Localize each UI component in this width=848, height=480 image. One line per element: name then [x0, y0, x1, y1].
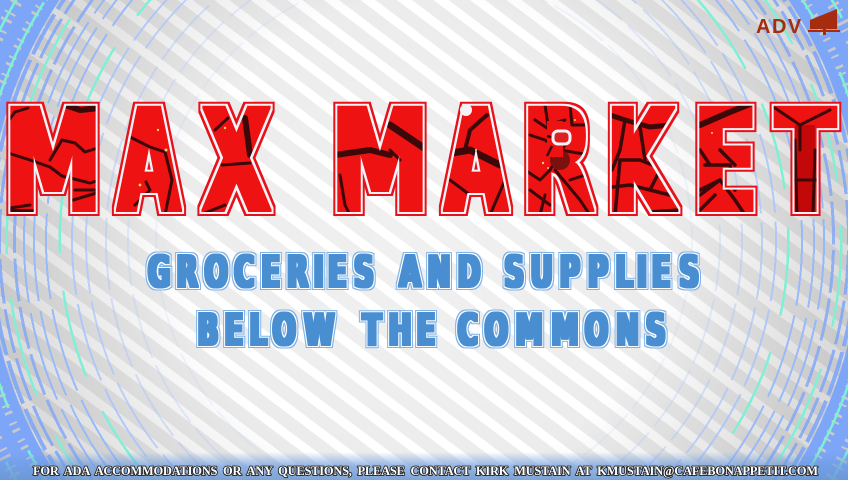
footer glow band	[0, 452, 848, 480]
title: MAX MARKET: A	[118, 80, 180, 246]
logo: ADV: ADV	[756, 16, 803, 38]
title: MAX MARKET: E	[694, 79, 757, 245]
footer contact text: FOR ADA ACCOMMODATIONS OR ANY QUESTIONS, PLEASE CONTACT KIRK MUSTAIN AT KMUSTAIN@CAFEBONAPPETIT.COM	[33, 464, 818, 478]
title: MAX MARKET: K	[607, 79, 676, 245]
title: MAX MARKET: R	[523, 80, 593, 246]
logo: ADV	[756, 9, 840, 38]
title: MAX MARKET: A	[445, 80, 507, 246]
subtitle line 2: BELOWTHECOMMONS	[198, 304, 666, 356]
title: MAX MARKET	[6, 102, 842, 216]
title: MAX MARKET: M	[4, 78, 102, 245]
title: MAX MARKET: X	[203, 78, 270, 245]
title: MAX MARKET: T	[776, 79, 835, 245]
title: MAX MARKET: M	[331, 78, 429, 245]
subtitle line 1: GROCERIESANDSUPPLIES	[148, 246, 699, 298]
